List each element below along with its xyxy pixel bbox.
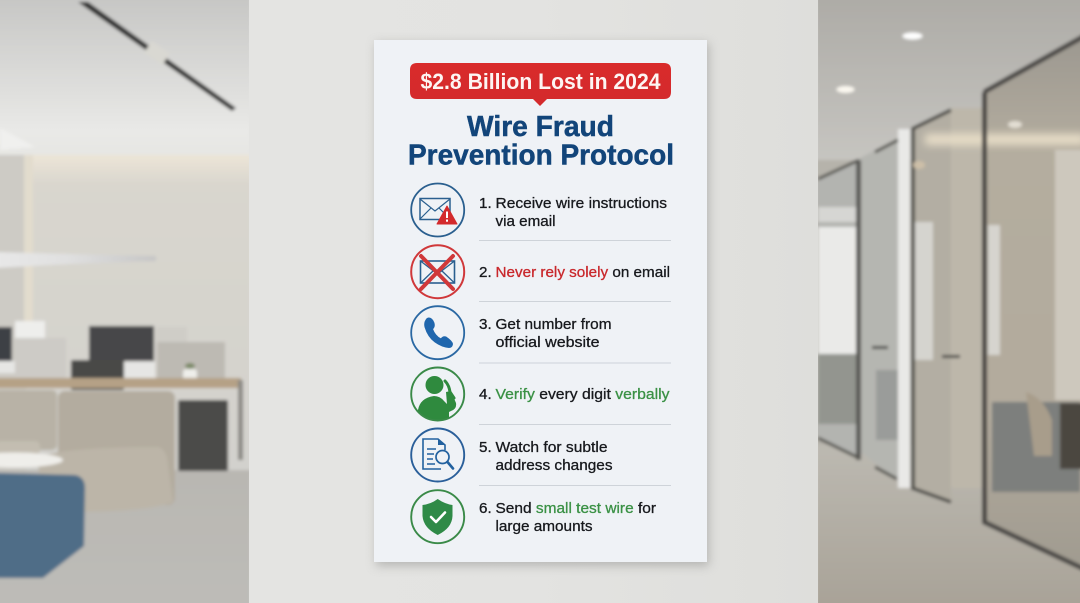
title: Prevention Protocol [408, 140, 674, 172]
step 6 text: 6. [479, 500, 492, 517]
step 1 text: Receive wire instructions [496, 195, 667, 212]
step 3 text: Get number from [496, 316, 612, 333]
step 5 text: Watch for subtle [496, 439, 608, 456]
step 5 text: 5. [479, 439, 492, 456]
icon: document search [411, 428, 464, 482]
step 4 text: 4. [479, 386, 492, 403]
step 5 text [479, 439, 613, 474]
step 3 text [479, 316, 612, 351]
step 6 text: Send small test wire for [496, 500, 656, 517]
icon: shield check [411, 490, 464, 543]
step 5 text: address changes [496, 457, 613, 474]
step 6 text [479, 500, 656, 535]
step 1 text [479, 195, 667, 230]
icon: no email [411, 245, 464, 298]
right office background [816, 0, 1080, 603]
banner: loss figure: $2.8 Billion Lost in 2024 [420, 69, 661, 94]
icon: phone [411, 306, 464, 359]
poster shadow [376, 43, 709, 566]
icon: person on phone [411, 368, 464, 425]
central wall [249, 0, 818, 603]
step 1 text: 1. [479, 195, 492, 212]
step 4 text: Verify every digit verbally [496, 386, 670, 403]
step 2 text: Never rely solely on email [496, 264, 670, 281]
step 1 text: via email [496, 213, 556, 230]
icon: email warning [411, 184, 464, 236]
poster: wire fraud protocol [374, 40, 707, 562]
title: Wire Fraud [467, 111, 614, 143]
banner: loss figure [410, 63, 671, 106]
title [408, 111, 674, 172]
step 3 text: 3. [479, 316, 492, 333]
step 6 text: large amounts [496, 518, 593, 535]
step 3 text: official website [496, 334, 600, 351]
left office background [0, 0, 251, 603]
step 2 text: 2. [479, 264, 492, 281]
